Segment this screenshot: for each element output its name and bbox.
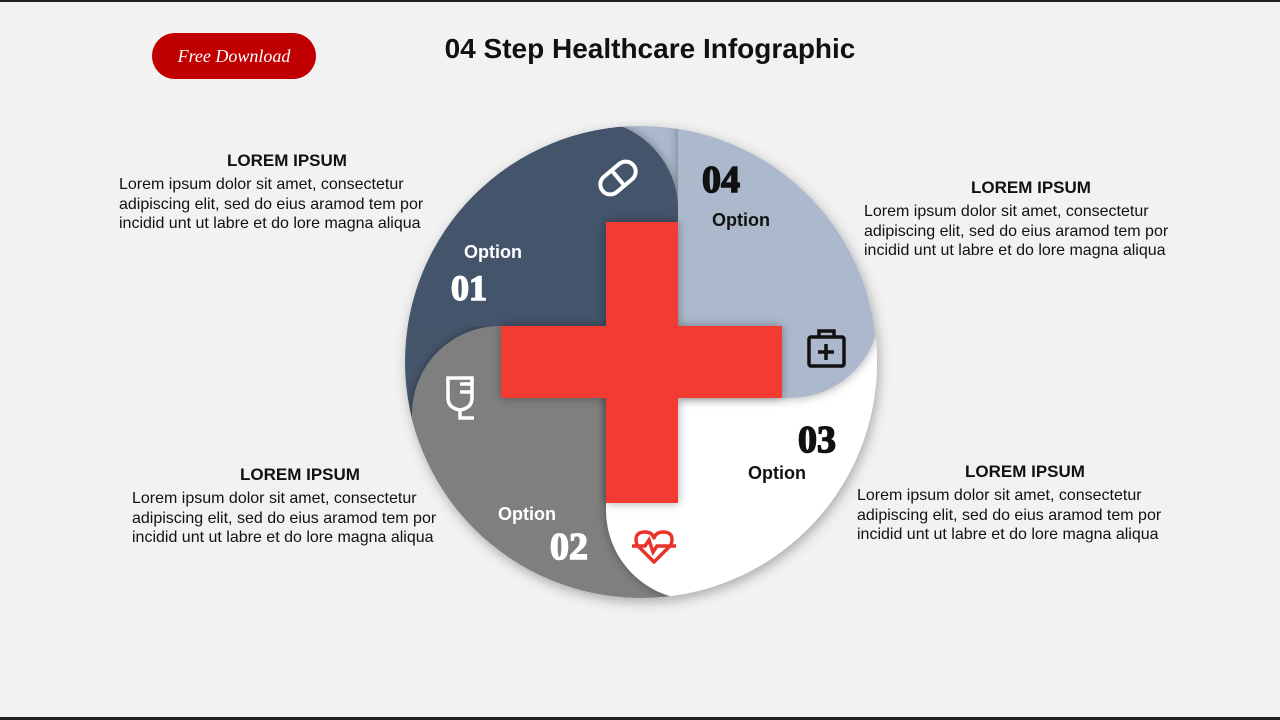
label 02: Option [498, 504, 556, 524]
text block: bottom left: adipiscing elit, sed do eius aramod tem por [132, 510, 437, 527]
label 03: Option [748, 463, 806, 483]
label 03: 03 [798, 419, 836, 461]
label 04: Option [712, 210, 770, 230]
text block: bottom right: incidid unt ut labre et do lore magna aliqua [857, 526, 1159, 543]
label 03 [748, 419, 836, 483]
text block: bottom left [132, 465, 437, 546]
text block: bottom right: Lorem ipsum dolor sit amet, consectetur [857, 487, 1142, 504]
label 01 [451, 242, 522, 308]
label 01: 01 [451, 268, 487, 308]
icon: medical kit [809, 331, 844, 366]
icon: pill [596, 157, 640, 199]
text block: bottom left: incidid unt ut labre et do lore magna aliqua [132, 529, 434, 546]
text block: top right [864, 178, 1169, 259]
text block: top left: incidid unt ut labre et do lore magna aliqua [119, 215, 421, 232]
circle diagram [400, 123, 886, 609]
text block: bottom right: LOREM IPSUM [965, 462, 1085, 481]
text block: top left [119, 151, 424, 232]
title: 04 Step Healthcare Infographic [445, 33, 855, 64]
label 02 [498, 504, 588, 568]
text block: bottom left: Lorem ipsum dolor sit amet, consectetur [132, 490, 417, 507]
label 04: 04 [702, 159, 740, 201]
text block: top right: adipiscing elit, sed do eius aramod tem por [864, 223, 1169, 240]
text block: top right: LOREM IPSUM [971, 178, 1091, 197]
icon: IV bag [448, 378, 474, 418]
text block: top left: LOREM IPSUM [227, 151, 347, 170]
label 02: 02 [550, 526, 588, 568]
text block: bottom right [857, 462, 1162, 543]
icon: heartbeat [632, 532, 676, 562]
text block: top left: adipiscing elit, sed do eius aramod tem por [119, 196, 424, 213]
label 01: Option [464, 242, 522, 262]
text block: bottom right: adipiscing elit, sed do eius aramod tem por [857, 507, 1162, 524]
red cross [501, 222, 782, 503]
button: free download: Free Download [177, 46, 291, 66]
label 04 [702, 159, 770, 230]
text block: bottom left: LOREM IPSUM [240, 465, 360, 484]
text block: top left: Lorem ipsum dolor sit amet, consectetur [119, 176, 404, 193]
text block: top right: Lorem ipsum dolor sit amet, consectetur [864, 203, 1149, 220]
button: free download [152, 33, 316, 79]
text block: top right: incidid unt ut labre et do lore magna aliqua [864, 242, 1166, 259]
